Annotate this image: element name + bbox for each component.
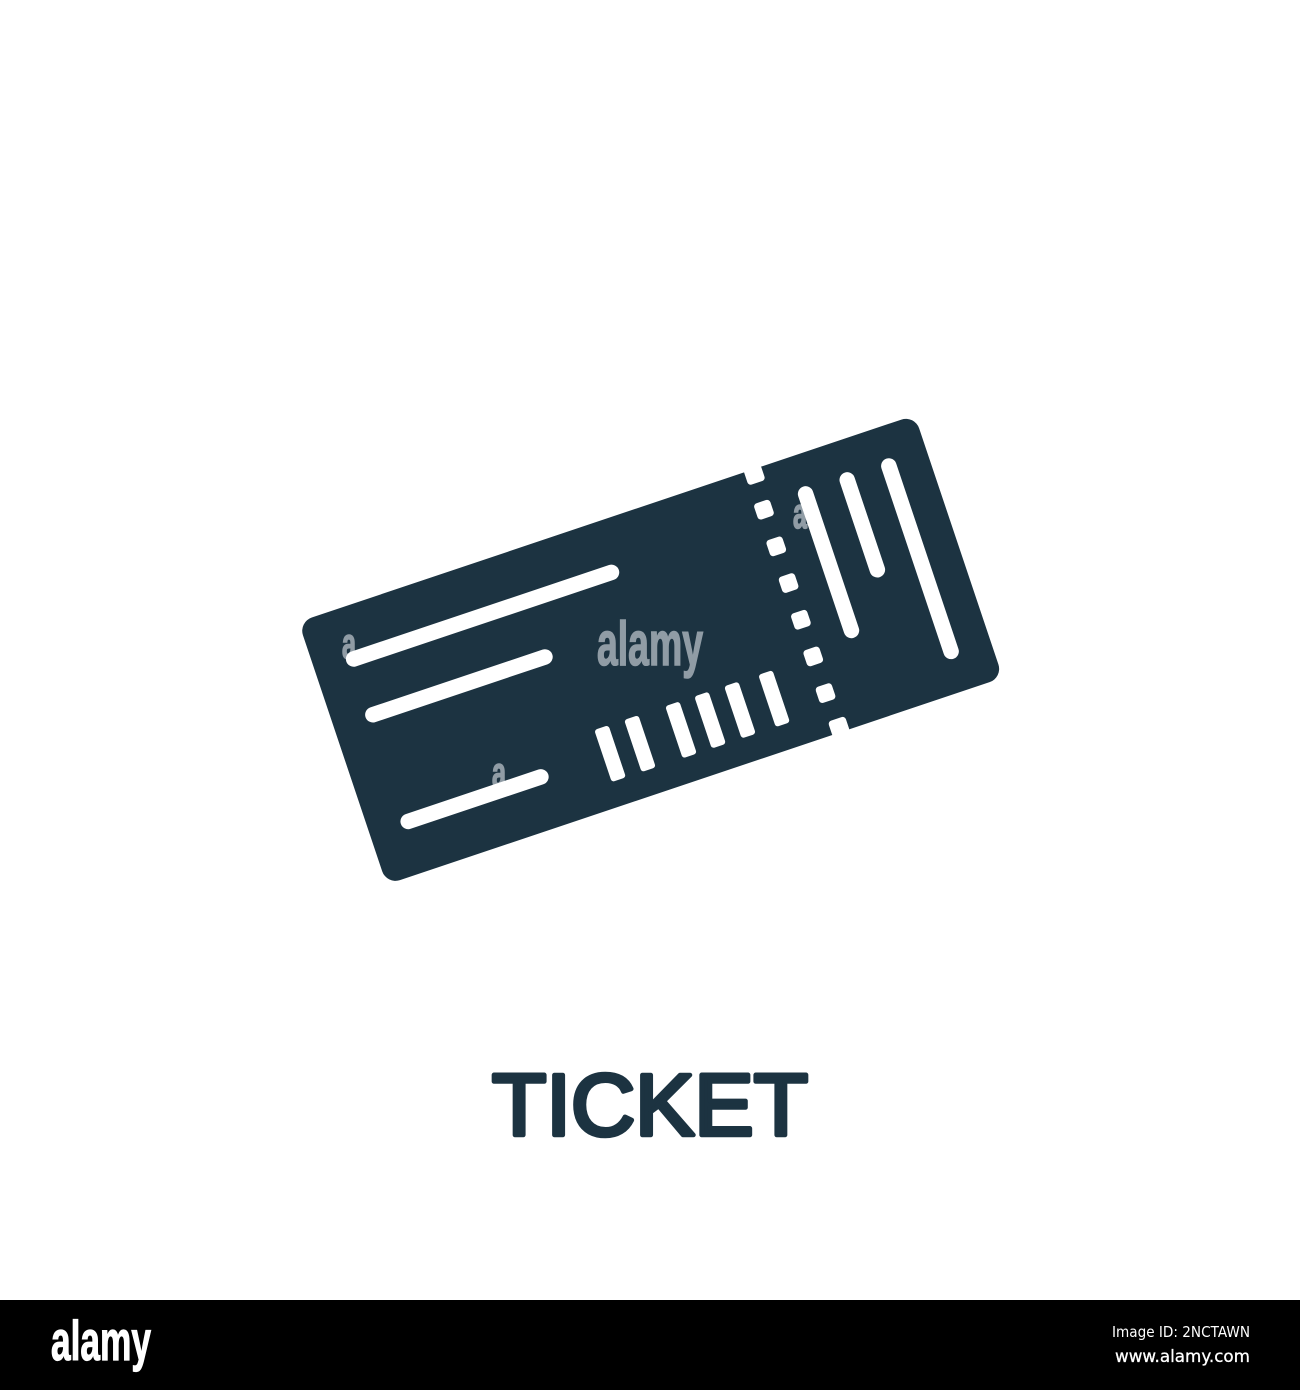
watermark on ticket: a <box>492 749 507 797</box>
icon: ticket <box>298 412 1004 887</box>
left text lines <box>354 572 666 821</box>
perforation squares <box>753 499 836 704</box>
ticket body <box>298 412 1004 887</box>
stub lines <box>806 466 951 679</box>
watermark on ticket <box>342 490 808 797</box>
footer logo: alamy <box>51 1309 151 1372</box>
watermark on ticket: alamy <box>597 610 703 679</box>
watermark on ticket: a <box>793 490 808 538</box>
title: TICKET: TICKET <box>492 1057 808 1154</box>
website: www.alamy.com <box>1115 1347 1250 1367</box>
footer bar <box>0 1300 1300 1390</box>
image id: Image ID: 2NCTAWN <box>1112 1323 1250 1341</box>
ticket details: lines, barcode and perforation <box>347 460 956 848</box>
barcode <box>594 670 790 782</box>
watermark on ticket: a <box>342 620 357 668</box>
